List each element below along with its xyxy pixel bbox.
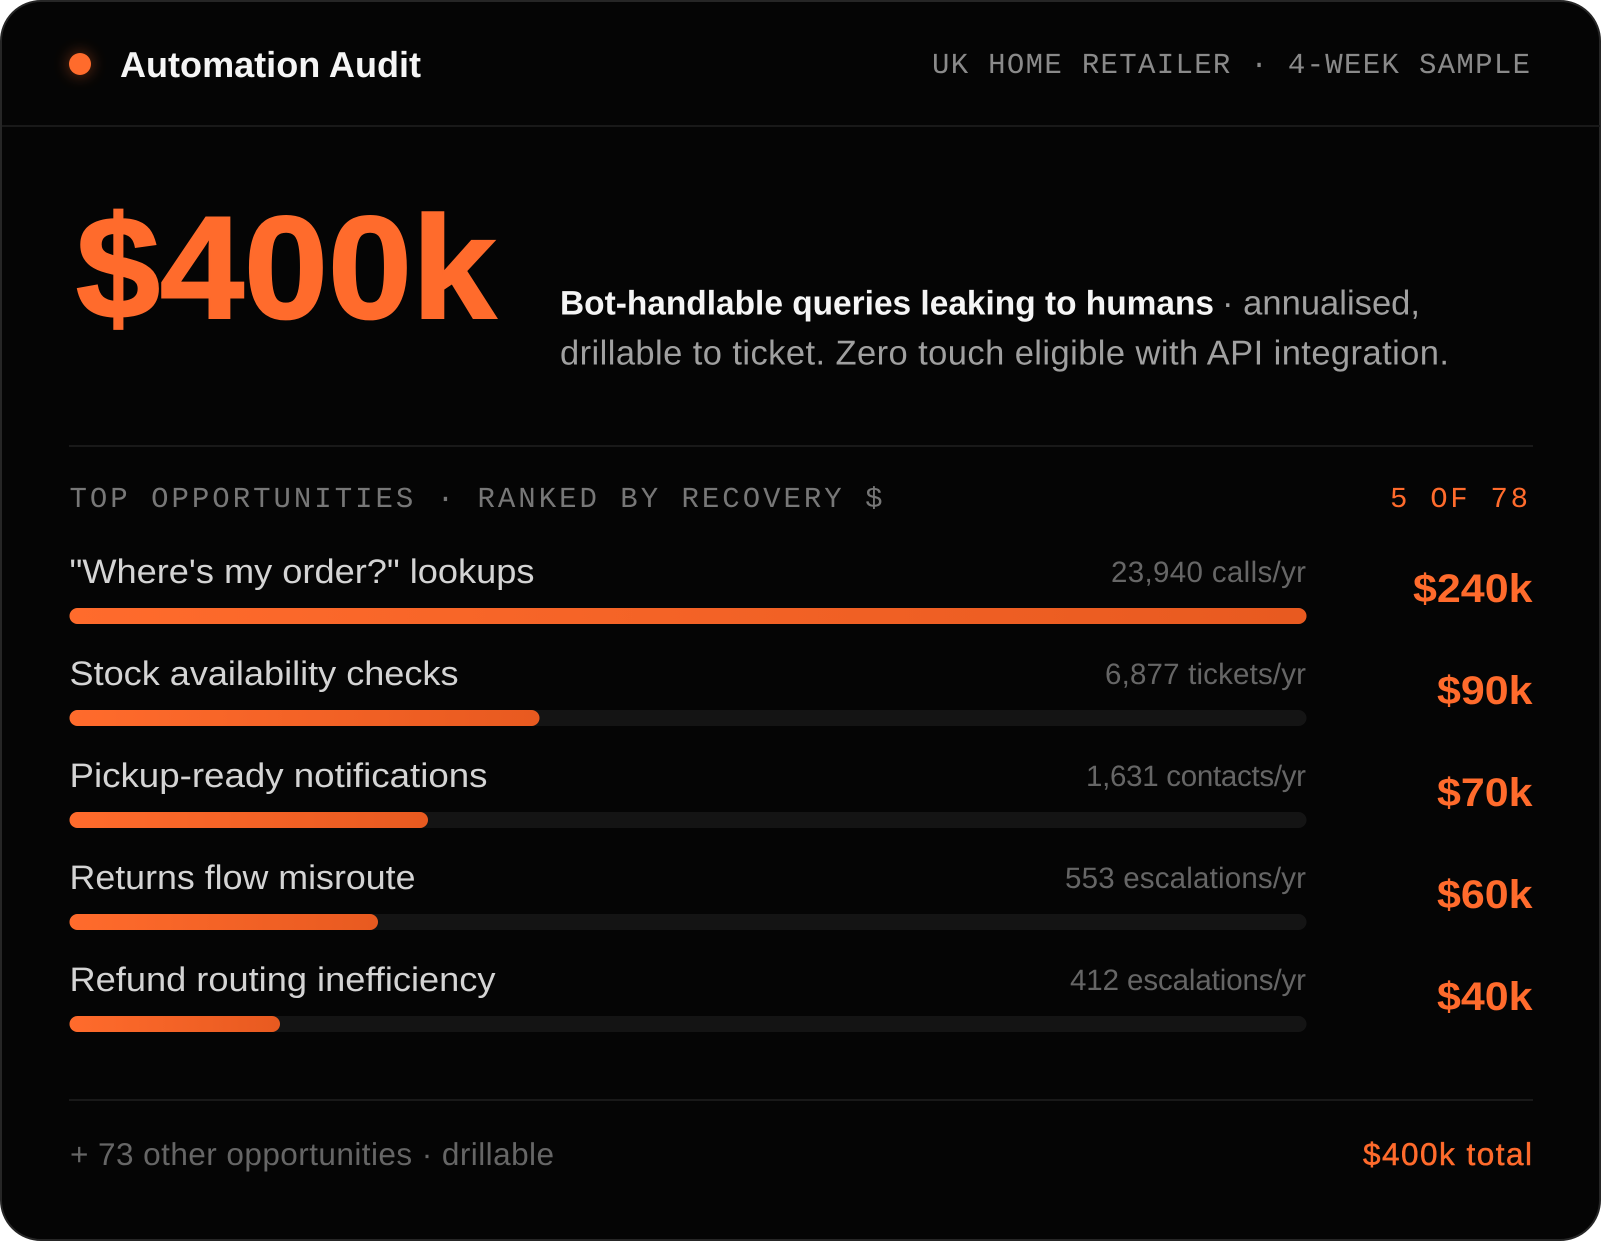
row: refund routing [70, 961, 1533, 1032]
opportunity count: 5 OF 78 [1390, 483, 1528, 516]
section heading: TOP OPPORTUNITIES · RANKED BY RECOVERY $ [70, 483, 883, 516]
row: stock availability: Stock availability checks [70, 655, 458, 693]
hero description: Bot-handlable queries leaking to humans [560, 284, 1214, 322]
header [67, 44, 1530, 85]
icon: status dot [67, 51, 93, 77]
row: refund routing: 412 escalations/yr [1070, 964, 1306, 997]
row: pickup-ready: Pickup-ready notifications [70, 757, 487, 795]
row: stock availability: 6,877 tickets/yr [1105, 658, 1306, 691]
row: refund routing: $40k [1437, 975, 1533, 1019]
hero figure: $400k [76, 186, 497, 349]
footer: + 73 other opportunities · drillable [70, 1136, 554, 1172]
row: where's my order: "Where's my order?" lookups [70, 553, 534, 591]
row: returns flow: Returns flow misroute [70, 859, 416, 897]
row: pickup-ready: 1,631 contacts/yr [1086, 760, 1306, 793]
title: Automation Audit [120, 44, 421, 85]
row: returns flow [70, 859, 1533, 930]
footer [70, 1136, 1532, 1172]
row: stock availability [70, 655, 1533, 726]
footer total: $400k total [1363, 1136, 1532, 1172]
hero description [560, 284, 1449, 372]
row: returns flow: $60k [1437, 873, 1533, 917]
row: where's my order: 23,940 calls/yr [1111, 556, 1306, 589]
row: where's my order [70, 553, 1533, 624]
section heading [70, 483, 1528, 516]
hero description: drillable to ticket. Zero touch eligible with API integration. [560, 334, 1449, 372]
row: returns flow: 553 escalations/yr [1065, 862, 1306, 895]
header meta: UK HOME RETAILER · 4-WEEK SAMPLE [932, 49, 1530, 82]
row: pickup-ready [70, 757, 1533, 828]
row: pickup-ready: $70k [1437, 771, 1533, 815]
hero description: · annualised, [1222, 284, 1420, 322]
row: refund routing: Refund routing inefficiency [70, 961, 496, 999]
row: where's my order: $240k [1413, 567, 1533, 611]
row: stock availability: $90k [1437, 669, 1533, 713]
